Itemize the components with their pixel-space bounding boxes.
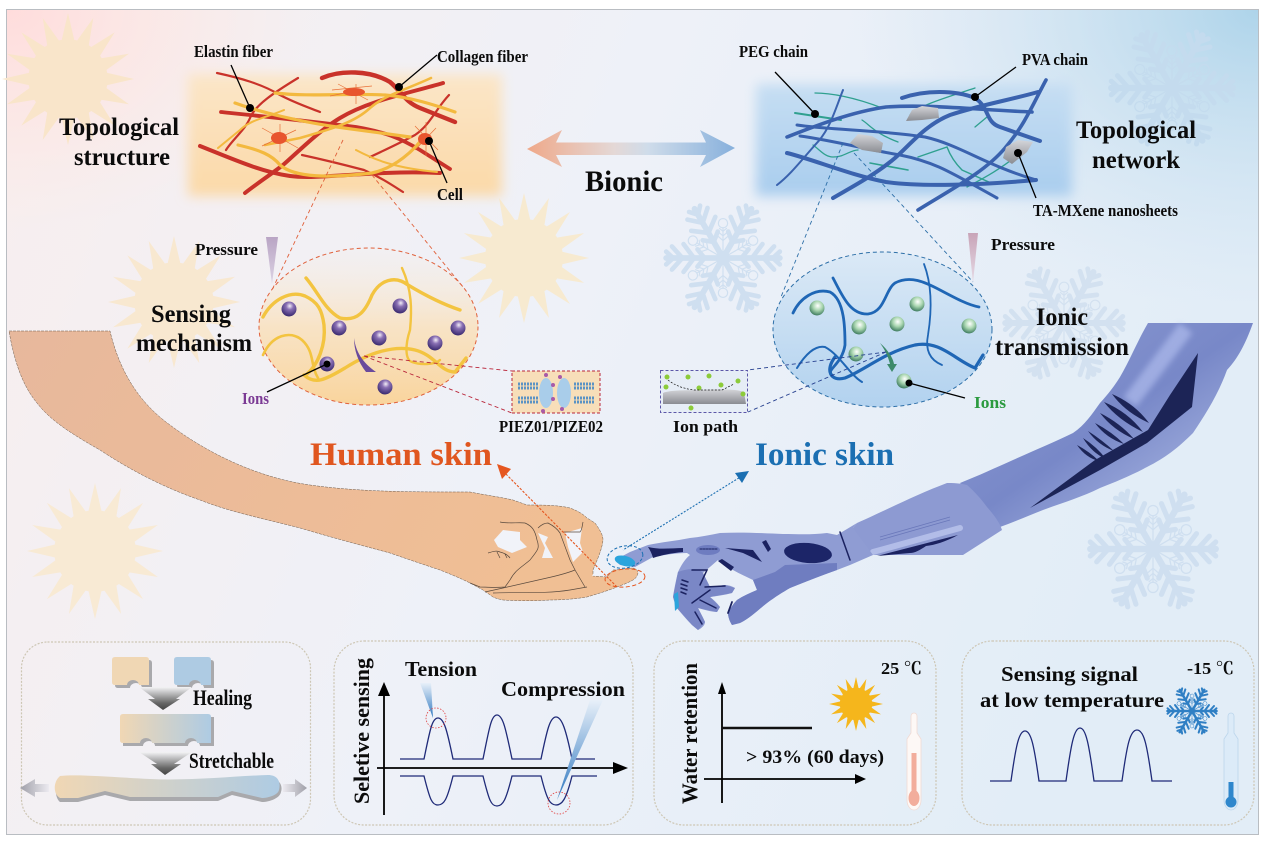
hand shape [615,523,873,630]
text: ion path: Ion path [673,417,739,436]
icon: snowflake lower right [1090,487,1216,611]
heading: ionic skin: Ionic skin [755,437,894,473]
heading: topological structure: Topological [59,114,179,141]
panel: low temperature sensing [962,641,1254,825]
dark armor panel [1030,353,1198,508]
panel: ionic skin topological network [756,80,1072,210]
callout: PVA chain leader [971,67,1016,101]
arrow: stretchable [139,752,192,775]
text: pressure left: Pressure [195,240,258,259]
zoom lines: to ion path box [748,352,886,412]
text: sensing signal at low temperature: at low temperature [980,688,1164,712]
text: TA-MXene nanosheets: TA-MXene nanosheets [1033,201,1178,220]
vent slits [1077,394,1149,461]
heading: topological structure [59,114,179,171]
icon: purple ions [282,298,466,394]
icon: warm thermometer [907,713,921,810]
palm dark oval [783,541,833,565]
icon: pressure indicator left [266,237,278,284]
panel: PIEZO channel inset [512,371,600,413]
text: minus 15 C: -15 ℃ [1187,659,1234,678]
text: collagen fiber: Collagen fiber [437,47,528,66]
panel: sensing mechanism ellipse [259,248,478,405]
zoom lines: left [272,140,463,290]
arrow: stretch right [283,779,307,797]
icon: snowflake top right [1111,28,1233,148]
icon: healed block [120,714,214,746]
heading: sensing mechanism [136,301,252,357]
callout: TA-MXene leader [1014,149,1036,198]
icon: stretched block [55,775,282,802]
heading: bionic: Bionic [585,165,663,198]
chart: retention line [722,727,812,729]
heading: sensing mechanism: mechanism [136,330,252,357]
callout: cell leader [425,137,447,183]
arrow: human skin pointer [497,464,617,587]
icon: pressure indicator right [968,233,978,283]
panel: ionic transmission ellipse [773,252,992,407]
icon: snowflake centre [666,202,780,314]
heading: topological structure: structure [74,144,170,171]
heading: ionic transmission: Ionic [1036,304,1088,331]
icon: cells [262,84,438,156]
forearm cuff [853,483,1002,555]
icon: robot fingertip highlight [605,543,645,571]
panel: human skin topological structure [188,72,502,196]
marker: tension peak [426,708,446,728]
arrow: ionic skin pointer [623,471,749,550]
text: ions green: Ions [974,393,1006,412]
palm shading [728,563,837,625]
text: PVA chain: PVA chain [1022,50,1088,69]
icon: TA-MXene nanosheets [850,106,1033,164]
icon: sun centre [459,193,589,323]
icon: cold thermometer [1224,713,1238,810]
diagram: PEG and PVA chains [777,80,1046,210]
text: pressure right: Pressure [991,235,1055,254]
icon: tension pointer [420,683,433,718]
text: cell: Cell [437,185,463,204]
text: ions purple: Ions [242,389,269,408]
text: elastin fiber: Elastin fiber [194,42,273,61]
chart: low temperature signal [990,728,1172,781]
panel: water retention [654,641,936,825]
arrow: green curved [880,343,897,372]
illustration: robotic arm and hand [614,323,1253,630]
chart axes [377,682,628,815]
text: PIEZO label: PIEZ01/PIZE02 [499,417,603,436]
icon: green ions [810,296,976,388]
panel: healing and stretchable [20,642,310,825]
heading: ionic transmission: transmission [995,334,1129,361]
text: 25 C: 25 ℃ [881,659,922,678]
text: y-axis label selective sensing: Seletive sensing [349,658,374,804]
knuckle plate [696,545,720,555]
diagram: collagen and elastin fibers [200,72,455,193]
arrow: bionic double arrow [527,130,735,167]
zoom lines: right [781,143,973,297]
panel: ion path inset [660,370,748,412]
panel: selective sensing [334,641,633,825]
arrow: healing [139,687,192,710]
chart: tension wave [400,715,595,759]
text: sensing signal at low temperature [980,662,1164,712]
text: PEG chain: PEG chain [739,42,808,61]
gaps between fingers [494,528,605,576]
heading: topological network: Topological [1076,117,1196,144]
text: compression: Compression [501,677,625,701]
callout: green ions leader [906,380,965,398]
text: retention value: > 93% (60 days) [746,747,884,768]
callout: purple ions leader [267,360,330,392]
diagram: blue chains [793,264,983,382]
heading: human skin: Human skin [310,437,492,473]
icon: sun beside sensing mechanism [108,236,240,368]
icon: blue snowflake [1168,687,1216,735]
mechanical dark details [648,540,771,571]
heading: sensing mechanism: Sensing [151,301,231,328]
callout: elastin fiber leader [231,65,254,112]
icon: sun [829,677,883,731]
heading: topological network: network [1092,147,1180,174]
lower fingers shading [673,569,735,630]
arrow: purple curved [354,338,376,372]
diagram: yellow fibers [263,268,466,380]
fingertip sensor [614,553,679,611]
finger outlines [470,522,587,593]
text: healing: Healing [193,685,252,710]
text: tension: Tension [405,657,477,681]
callout: PEG chain leader [775,72,819,118]
robotic upper arm [960,323,1253,527]
icon: sun top left [2,13,134,145]
chart: compression wave [400,776,597,806]
icon: separate tan and blue blocks [112,657,214,688]
icon: compression pointer [557,700,603,800]
text: y-axis label water retention: Water retention [677,663,702,804]
illustration: human arm and hand [9,331,638,601]
marker: compression trough [548,792,570,814]
callout: collagen fiber leader [395,55,437,91]
text: stretchable: Stretchable [189,748,274,773]
zoom lines: to PIEZO box [364,356,512,413]
arrow: stretch left [20,779,49,797]
text: sensing signal at low temperature: Sensing signal [1001,662,1138,686]
icon: sun lower left [27,483,163,619]
icon: snowflake behind ionic transmission [1005,265,1123,381]
heading: topological network [1076,117,1196,174]
chart axes [704,682,866,803]
heading: ionic transmission [995,304,1129,361]
icon: human fingertip highlight [604,567,646,589]
